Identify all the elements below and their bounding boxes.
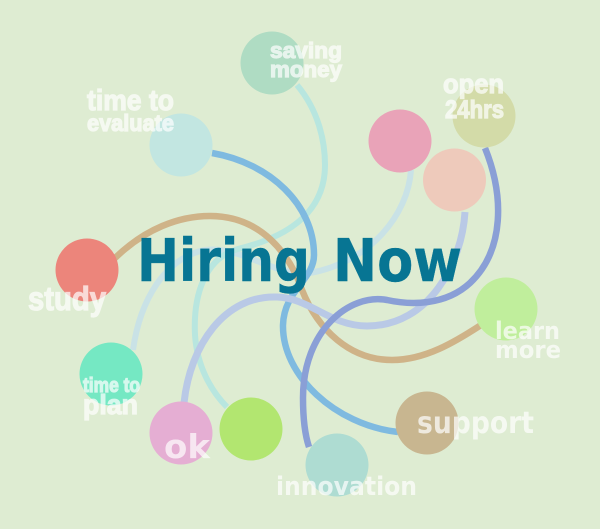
circle: green — [220, 398, 282, 460]
label: learn more: learn — [495, 317, 560, 345]
connectors — [113, 85, 498, 447]
connector: tan, red circle to learn more — [113, 216, 481, 360]
title — [137, 226, 462, 295]
circle: study — [56, 238, 118, 302]
label: open 24hrs: 24hrs — [445, 96, 504, 124]
title: Hiring — [137, 226, 310, 295]
label: ok: ok — [164, 427, 211, 466]
label: time to plan — [83, 375, 140, 420]
circle: open 24hrs — [452, 84, 516, 148]
circle: saving money — [240, 32, 304, 94]
circle: time to plan — [80, 342, 142, 406]
connector: light blue, pink circle to time to plan — [133, 170, 411, 350]
circle: ok — [150, 402, 212, 464]
label: time to plan: plan — [83, 389, 138, 420]
label: innovation: innovation — [276, 472, 417, 502]
label: open 24hrs — [443, 69, 504, 124]
label: study: study — [28, 280, 107, 317]
circle: support — [396, 392, 458, 454]
label: time to plan: time to — [83, 375, 140, 397]
label: saving money: money — [270, 57, 343, 82]
label: saving money — [270, 38, 343, 82]
circle: innovation — [306, 434, 368, 496]
circle: time to evaluate — [150, 114, 212, 176]
circle: pink — [368, 110, 432, 172]
label: time to evaluate: evaluate — [87, 110, 174, 136]
connector: blue, time to evaluate to support — [212, 153, 398, 432]
label: learn more: more — [495, 336, 561, 364]
label: time to evaluate — [87, 85, 174, 136]
circle: learn more — [474, 278, 538, 340]
label: time to evaluate: time to — [87, 85, 174, 117]
circle: peach — [423, 148, 486, 212]
connector: pale periwinkle, peach circle to ok — [184, 212, 465, 403]
label: open 24hrs: open — [443, 69, 504, 99]
label: saving money: saving — [270, 38, 342, 63]
label: support: support — [417, 406, 534, 441]
connector: periwinkle, open 24hrs to innovation — [303, 148, 498, 447]
connector: light teal, saving money to green circle — [195, 85, 325, 407]
label: learn more — [495, 317, 561, 364]
title: Now — [333, 226, 462, 295]
